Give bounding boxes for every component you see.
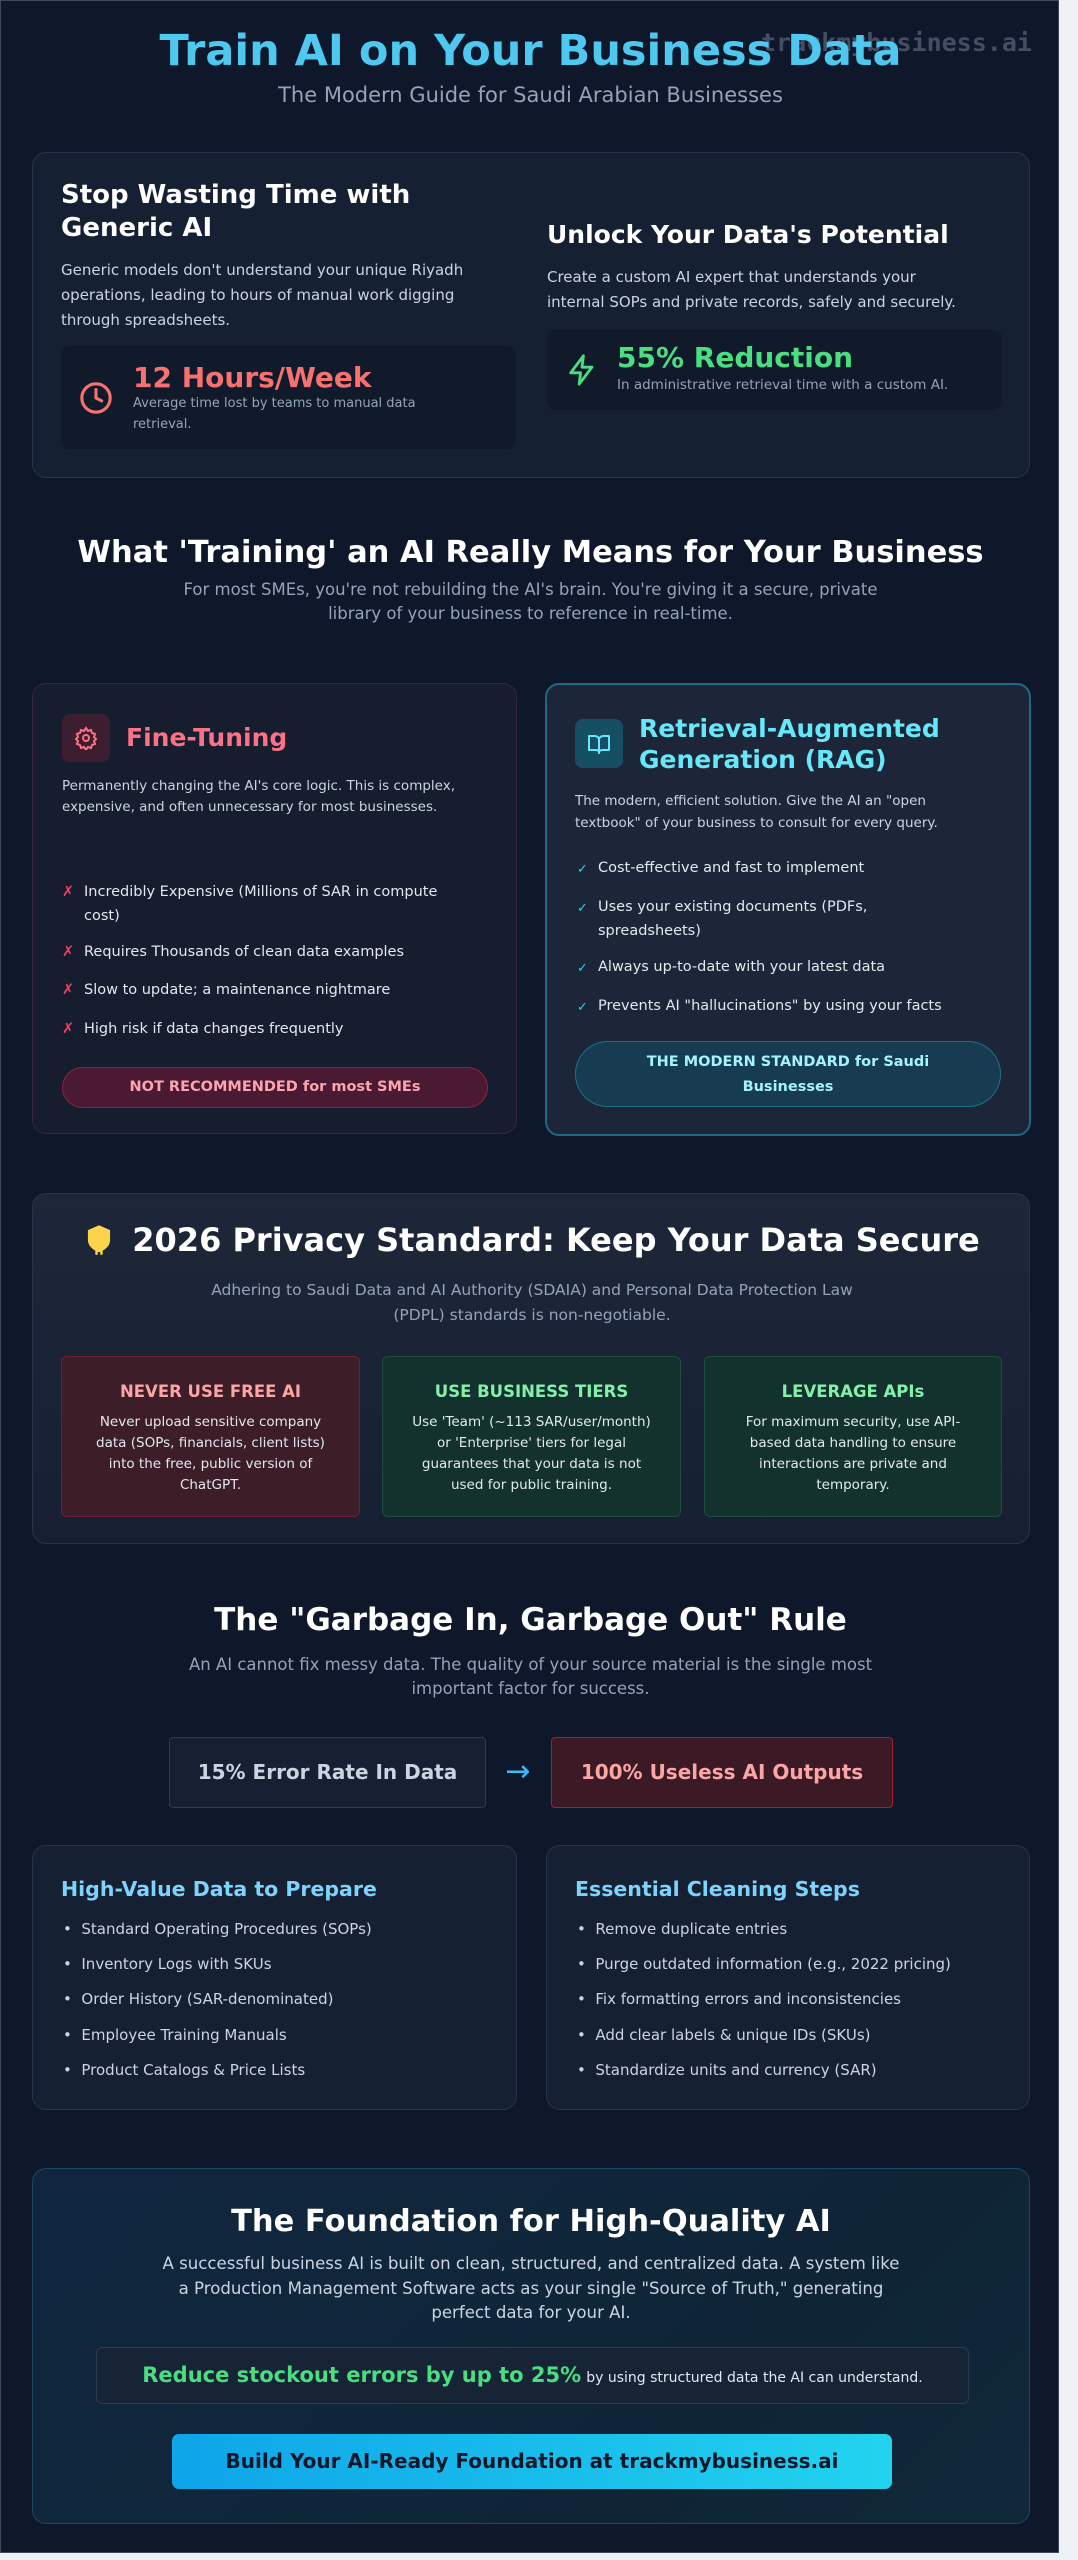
panel: RAG: Cost-effective and fast to implement bbox=[598, 860, 864, 876]
panel: RAG: ✓ bbox=[577, 901, 588, 916]
box: never use free AI: Never upload sensitive company data (SOPs, financials, client lists) into the free, public version of ChatGPT. bbox=[96, 1414, 325, 1493]
watermark: trackmybusiness.ai bbox=[761, 28, 1032, 57]
panel: high-value data list: • Inventory Logs with SKUs bbox=[63, 1955, 272, 1973]
panel: fine-tuning bbox=[32, 683, 517, 1134]
panel: cleaning steps list bbox=[546, 1845, 1030, 2110]
panel: RAG: ✓ bbox=[577, 862, 588, 877]
section subtitle: For most SMEs, you're not rebuilding the AI's brain. You're giving it a secure, private library of your business to reference in real-time. bbox=[183, 580, 878, 623]
panel: RAG: Uses your existing documents (PDFs, spreadsheets) bbox=[598, 899, 867, 939]
panel: fine-tuning: Slow to update; a maintenance nightmare bbox=[84, 982, 390, 998]
heading: foundation: The Foundation for High-Quality AI bbox=[231, 2204, 831, 2239]
pill: modern standard: Businesses bbox=[743, 1079, 833, 1095]
panel: high-value data list: • Order History (SAR-denominated) bbox=[63, 1990, 333, 2008]
panel: fine-tuning: ✗ bbox=[62, 944, 74, 960]
panel: high-value data list: • Product Catalogs & Price Lists bbox=[63, 2061, 305, 2079]
panel: fine-tuning: ✗ bbox=[62, 982, 74, 998]
box: never use free AI bbox=[61, 1356, 360, 1517]
text: RAG description: The modern, efficient solution. Give the AI an "open textbook" of your business to consult for every query. bbox=[575, 793, 938, 831]
section heading: garbage in garbage out: The "Garbage In, Garbage Out" Rule bbox=[214, 1602, 847, 1638]
panel: fine-tuning: ✗ bbox=[62, 1021, 74, 1037]
panel: foundation bbox=[32, 2168, 1030, 2524]
section heading: training: What 'Training' an AI Really Means for Your Business bbox=[77, 535, 984, 570]
stat: reduce stockout errors bbox=[96, 2347, 969, 2404]
panel: high-value data list: • Employee Training Manuals bbox=[63, 2026, 287, 2044]
panel: high-value data list: High-Value Data to Prepare bbox=[61, 1877, 377, 1901]
stat: 12 hours/week: 12 Hours/Week bbox=[133, 361, 372, 394]
stat: 55% reduction: In administrative retrieval time with a custom AI. bbox=[617, 377, 948, 393]
heading: privacy with shield icon: 2026 Privacy Standard: Keep Your Data Secure bbox=[132, 1221, 980, 1259]
text: foundation description: a Production Management Software acts as your single "Source of Truth," generating bbox=[179, 2278, 883, 2298]
heading: fine-tuning: Fine-Tuning bbox=[126, 723, 287, 752]
pill: modern standard: THE MODERN STANDARD for Saudi bbox=[647, 1054, 929, 1070]
panel: fine-tuning: ✗ bbox=[62, 884, 74, 900]
stat: 55% reduction: 55% Reduction bbox=[617, 341, 853, 374]
stat: 12 hours/week: Average time lost by teams to manual data retrieval. bbox=[133, 396, 416, 432]
heading: stop wasting time: Stop Wasting Time with Generic AI bbox=[61, 180, 410, 243]
text: custom AI expert: Create a custom AI expert that understands your internal SOPs and private records, safely and securely. bbox=[547, 268, 956, 311]
button: CTA bbox=[172, 2434, 892, 2489]
icon: bolt bbox=[569, 354, 594, 386]
box: 15% error rate: 15% Error Rate In Data bbox=[198, 1760, 457, 1784]
panel: RAG: ✓ bbox=[577, 961, 588, 976]
text: privacy subtitle: Adhering to Saudi Data and AI Authority (SDAIA) and Personal Data Protection Law (PDPL) standards is non-negotiable. bbox=[211, 1281, 853, 1324]
panel: cleaning steps list: • Purge outdated information (e.g., 2022 pricing) bbox=[577, 1955, 951, 1973]
panel: fine-tuning: Incredibly Expensive (Millions of SAR in compute cost) bbox=[84, 884, 437, 924]
title: Train AI on Your Business Data bbox=[160, 26, 901, 76]
panel: fine-tuning: High risk if data changes frequently bbox=[84, 1021, 344, 1037]
box: leverage APIs: For maximum security, use API-based data handling to ensure interactions are private and temporary. bbox=[746, 1414, 960, 1493]
box: use business tiers: USE BUSINESS TIERS bbox=[435, 1382, 628, 1401]
panel: cleaning steps list: • Fix formatting errors and inconsistencies bbox=[577, 1990, 901, 2008]
heading: unlock potential: Unlock Your Data's Potential bbox=[547, 220, 949, 249]
panel: RAG bbox=[545, 683, 1031, 1136]
panel: RAG: ✓ bbox=[577, 1000, 588, 1015]
box: never use free AI: NEVER USE FREE AI bbox=[120, 1382, 301, 1401]
panel: problem and potential bbox=[32, 152, 1030, 478]
panel: RAG: Always up-to-date with your latest data bbox=[598, 959, 885, 975]
pill: modern standard bbox=[575, 1041, 1001, 1107]
arrow: → bbox=[505, 1754, 531, 1789]
icon: book bbox=[575, 719, 623, 768]
text: generic models: Generic models don't understand your unique Riyadh operations, leading to hours of manual work digging through spreadsheets. bbox=[61, 261, 463, 329]
box: 100% useless outputs bbox=[551, 1737, 893, 1808]
stat: 12 hours/week bbox=[61, 346, 516, 449]
text: fine-tuning description: Permanently changing the AI's core logic. This is complex, expensive, and often unnecessary for most businesses. bbox=[62, 778, 455, 815]
heading: RAG: Retrieval-Augmented Generation (RAG) bbox=[639, 714, 940, 774]
pill: not recommended: NOT RECOMMENDED for most SMEs bbox=[130, 1079, 420, 1095]
panel: cleaning steps list: • Remove duplicate entries bbox=[577, 1920, 787, 1938]
stat: 55% reduction bbox=[547, 330, 1002, 410]
panel: high-value data list bbox=[32, 1845, 517, 2110]
subtitle: The Modern Guide for Saudi Arabian Businesses bbox=[278, 83, 783, 107]
list: RAG pros bbox=[577, 860, 942, 1015]
button: CTA: Build Your AI-Ready Foundation at trackmybusiness.ai bbox=[225, 2449, 838, 2473]
panel: privacy bbox=[32, 1193, 1030, 1544]
box: 15% error rate bbox=[169, 1737, 486, 1808]
panel: fine-tuning: Requires Thousands of clean data examples bbox=[84, 944, 404, 960]
box: use business tiers bbox=[382, 1356, 681, 1517]
stat: reduce stockout errors: Reduce stockout errors by up to 25% by using structured data the AI can understand. bbox=[142, 2363, 923, 2387]
panel: cleaning steps list: • Add clear labels & unique IDs (SKUs) bbox=[577, 2026, 871, 2044]
text: foundation description: A successful business AI is built on clean, structured, and centralized data. A system like bbox=[162, 2254, 900, 2273]
box: leverage APIs bbox=[704, 1356, 1002, 1517]
icon: clock bbox=[80, 382, 112, 414]
box: use business tiers: Use 'Team' (~113 SAR/user/month) or 'Enterprise' tiers for legal guarantees that your data is not used for public training. bbox=[412, 1414, 651, 1493]
icon: gear bbox=[62, 714, 110, 762]
box: leverage APIs: LEVERAGE APIs bbox=[782, 1382, 924, 1401]
text: foundation description bbox=[162, 2254, 900, 2322]
text: foundation description: perfect data for your AI. bbox=[431, 2303, 631, 2322]
panel: RAG: Prevents AI "hallucinations" by using your facts bbox=[598, 998, 942, 1014]
panel: cleaning steps list: • Standardize units and currency (SAR) bbox=[577, 2061, 877, 2079]
pill: not recommended bbox=[62, 1067, 488, 1108]
box: 100% useless outputs: 100% Useless AI Outputs bbox=[581, 1760, 863, 1784]
section subtitle: An AI cannot fix messy data. The quality of your source material is the single most important factor for success. bbox=[189, 1655, 872, 1698]
panel: cleaning steps list: Essential Cleaning Steps bbox=[575, 1877, 860, 1901]
panel: high-value data list: • Standard Operating Procedures (SOPs) bbox=[63, 1920, 372, 1938]
list: fine-tuning cons bbox=[62, 884, 437, 1037]
